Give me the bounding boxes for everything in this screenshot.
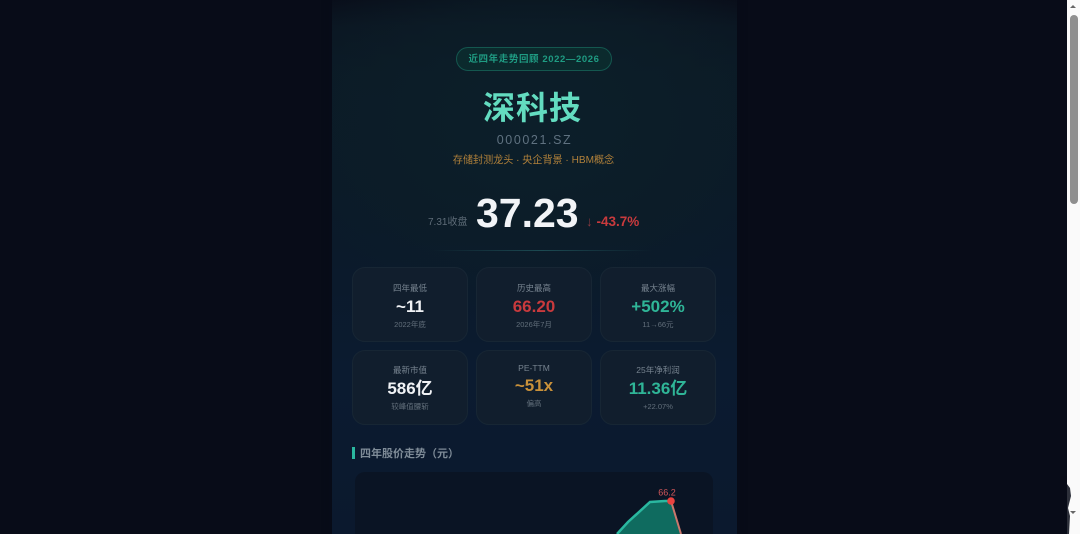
price block xyxy=(428,190,639,236)
price line rising xyxy=(617,501,671,534)
price date label: 7.31收盘 xyxy=(428,217,467,228)
line chart: four-year price xyxy=(355,472,713,534)
stat card: PE xyxy=(476,350,592,425)
browser scrollbar xyxy=(1067,0,1080,534)
stat card: four-year low: 2022年底 xyxy=(394,320,426,329)
stat card: all-time high xyxy=(476,267,592,342)
scrollbar down arrow xyxy=(1070,511,1076,514)
area under line xyxy=(617,501,681,534)
watermark edge xyxy=(1067,484,1071,534)
panel: main poster xyxy=(332,0,737,534)
stat card: net profit: +22.07% xyxy=(643,402,673,411)
stat card: all-time high: 66.20 xyxy=(513,297,555,316)
stat card: all-time high: 历史最高 xyxy=(517,283,551,293)
section heading: price trend xyxy=(352,447,459,460)
tagline: 存储封测龙头 · 央企背景 · HBM概念 xyxy=(453,154,614,166)
stat card: four-year low xyxy=(352,267,468,342)
stat card: max gain: 11→66元 xyxy=(642,320,674,329)
stat card: PE: PE-TTM xyxy=(518,363,550,373)
divider xyxy=(432,250,652,251)
title: 深科技 xyxy=(483,90,582,126)
stat card: PE: ~51x xyxy=(515,376,553,395)
dark watermark edge shape xyxy=(1060,476,1071,534)
stock code: 000021.SZ xyxy=(497,133,572,147)
price change: ↓ -43.7% xyxy=(586,214,639,229)
stat card: market cap: 最新市值 xyxy=(393,365,427,375)
stat card: net profit: 25年净利润 xyxy=(636,365,680,375)
peak marker xyxy=(667,497,675,505)
stat card: max gain: +502% xyxy=(631,297,685,316)
scrollbar up arrow xyxy=(1070,5,1076,8)
scrollbar thumb xyxy=(1070,15,1078,204)
stat card: net profit xyxy=(600,350,716,425)
badge: period: 近四年走势回顾 2022—2026 xyxy=(468,54,600,65)
stat card: market cap xyxy=(352,350,468,425)
heading text: 四年股价走势（元） xyxy=(360,448,459,460)
peak label: 66.2 xyxy=(658,488,676,498)
chart background xyxy=(355,472,713,534)
stat card: market cap: 586亿 xyxy=(387,379,433,398)
stat card: market cap: 较峰值腰斩 xyxy=(391,402,429,411)
stat card: four-year low: ~11 xyxy=(396,297,424,316)
heading accent bar xyxy=(352,447,355,459)
badge: period xyxy=(456,47,612,71)
stat card: max gain: 最大涨幅 xyxy=(641,283,675,293)
stat card: PE: 偏高 xyxy=(526,399,542,408)
stat card: max gain xyxy=(600,267,716,342)
stat card: all-time high: 2026年7月 xyxy=(516,320,552,329)
closing price: 37.23 xyxy=(476,190,579,236)
stat card: four-year low: 四年最低 xyxy=(393,283,427,293)
stat card: net profit: 11.36亿 xyxy=(629,379,687,398)
price line falling xyxy=(671,501,681,534)
